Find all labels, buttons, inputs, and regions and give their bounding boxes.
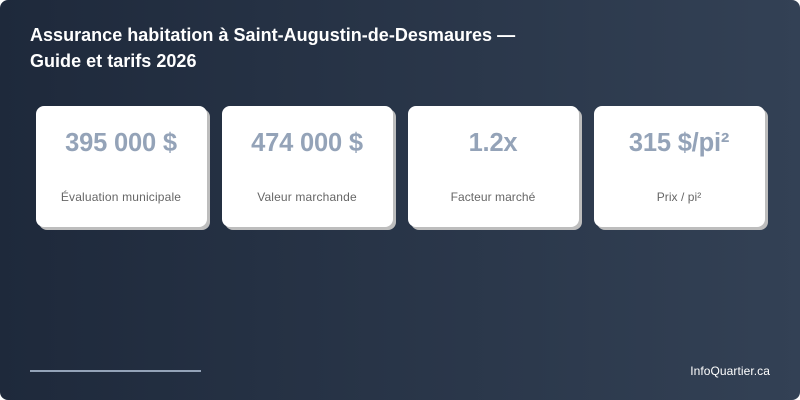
card: valeur marchande: [222, 106, 393, 227]
label: facteur: Facteur marché: [451, 190, 535, 204]
card: facteur marché: [408, 106, 579, 227]
value: facteur: 1.2x: [469, 129, 517, 157]
footer accent line: [30, 370, 201, 372]
title: Guide et tarifs 2026: [30, 51, 196, 71]
label: prix: Prix / pi²: [657, 190, 701, 204]
title: Assurance habitation à Saint-Augustin-de-Desmaures —: [30, 25, 515, 45]
brand: InfoQuartier.ca: [690, 364, 770, 378]
value: valeur marchande: 474 000 $: [251, 129, 363, 157]
value: évaluation: 395 000 $: [65, 129, 177, 157]
value: prix: 315 $/pi²: [629, 129, 729, 157]
card: prix par pied carré: [594, 106, 765, 227]
label: valeur marchande: Valeur marchande: [257, 190, 357, 204]
title: [30, 25, 516, 71]
label: évaluation: Évaluation municipale: [61, 190, 181, 204]
card: évaluation municipale: [36, 106, 207, 227]
